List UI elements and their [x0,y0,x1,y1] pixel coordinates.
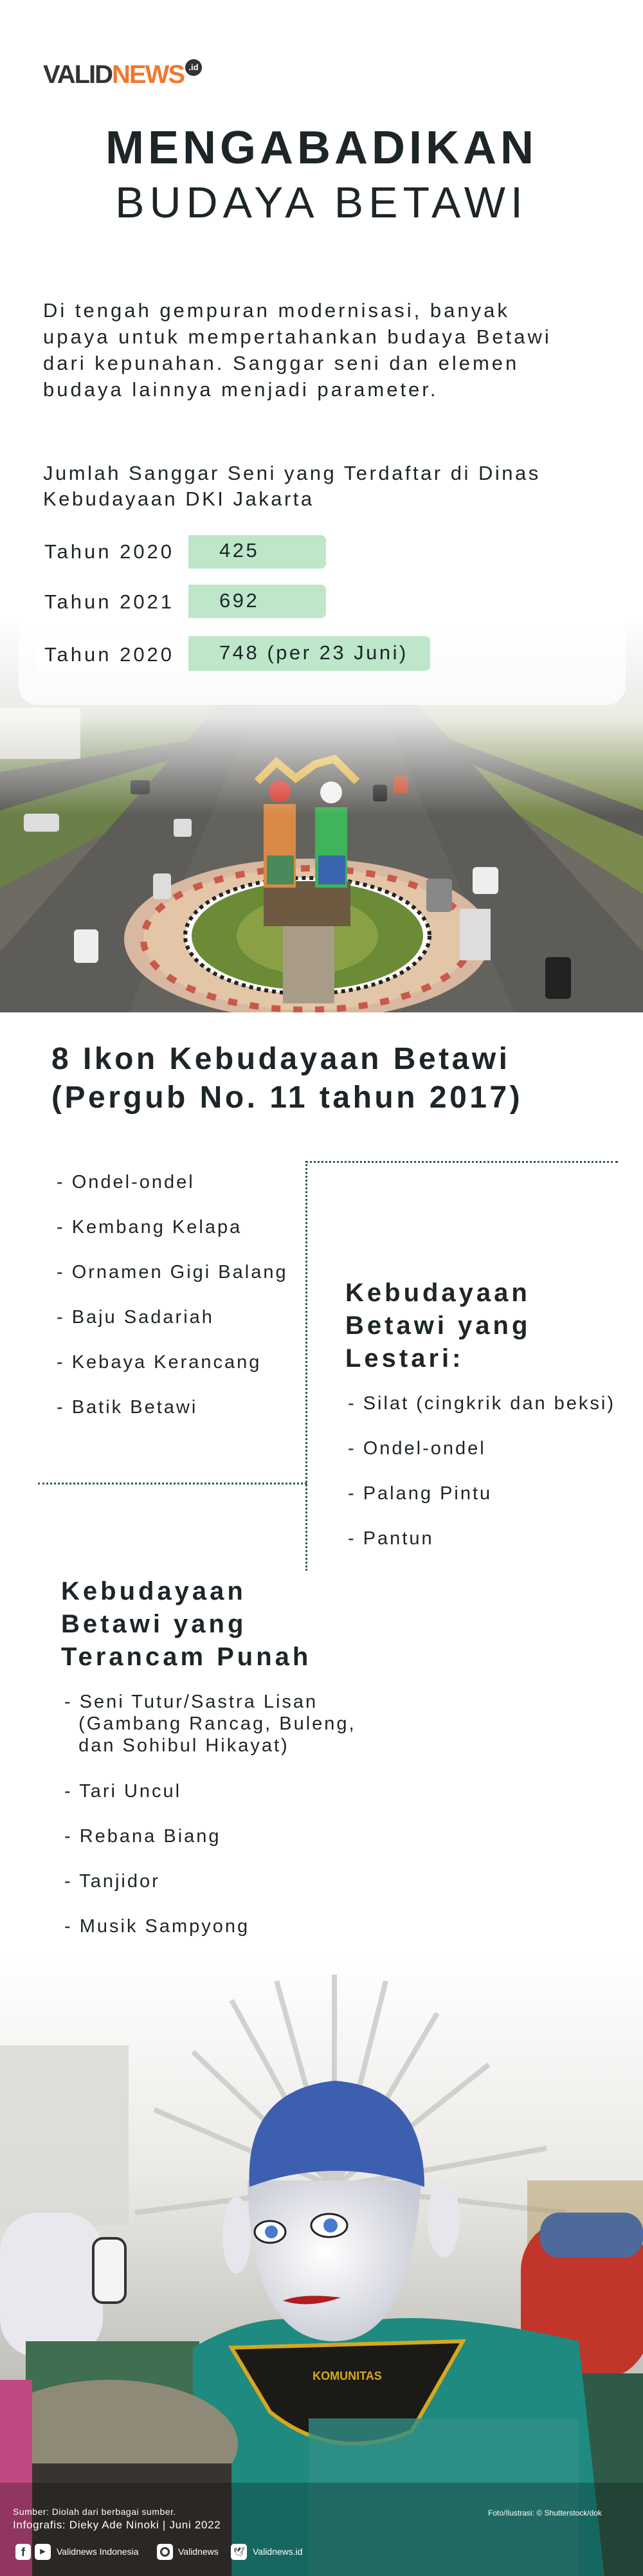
list: lestari: - Pantun [348,1528,434,1549]
heading: Lestari: Betawi yang [345,1311,530,1340]
heading: 8 Ikon: (Pergub No. 11 tahun 2017) [51,1081,523,1115]
logo: Validnews: .id [188,62,199,72]
title: MENGABADIKAN [105,122,538,174]
logo: Validnews: VALIDNEWS [43,60,184,89]
icon: youtube [35,2544,51,2560]
row 2021: 692 [219,589,259,612]
list: lestari: - Palang Pintu [348,1483,492,1504]
footer credits: Sumber: Diolah dari berbagai sumber. [13,2507,176,2517]
list: terancam punah: - Tari Uncul [64,1781,181,1802]
heading: Terancam Punah: Betawi yang [61,1610,246,1638]
social icons [15,2544,303,2560]
heading: Lestari [345,1279,530,1373]
list: 8 ikon: - Kebaya Kerancang [57,1352,261,1373]
intro paragraph [43,299,552,401]
footer credits [13,2507,221,2531]
chart heading [43,462,541,510]
list: 8 ikon: - Ornamen Gigi Balang [57,1262,288,1283]
chart heading: Kebudayaan DKI Jakarta [43,488,314,510]
intro paragraph: dari kepunahan. Sanggar seni dan elemen [43,352,519,374]
list: terancam punah: (Gambang Rancag, Buleng, [78,1713,356,1734]
list: terancam punah [64,1692,356,1937]
dotted dividers [305,1161,618,1163]
heading: 8 Ikon: 8 Ikon Kebudayaan Betawi [51,1042,511,1076]
social icons: Validnews.id [253,2546,303,2557]
title: BUDAYA BETAWI [115,178,528,227]
top panel background [19,0,626,705]
icon: instagram [157,2544,173,2560]
title [105,122,538,227]
icon: facebook: f [21,2546,25,2559]
row 2020 [44,535,326,569]
intro paragraph: Di tengah gempuran modernisasi, banyak [43,299,510,322]
list: terancam punah: - Musik Sampyong [64,1916,249,1937]
heading: Terancam Punah: Kebudayaan [61,1577,246,1605]
icon: twitter [231,2544,247,2560]
photo: ondel-ondel bottom [0,1975,643,2576]
list: terancam punah: dan Sohibul Hikayat) [78,1735,289,1756]
photo credit: Foto/Ilustrasi: © Shutterstock/dok [488,2508,602,2517]
list: 8 ikon: - Kembang Kelapa [57,1217,242,1238]
list: terancam punah: - Tanjidor [64,1871,160,1892]
list: 8 ikon: - Ondel-ondel [57,1172,195,1192]
chart heading: Jumlah Sanggar Seni yang Terdaftar di Dinas [43,462,541,484]
social icons: Validnews [178,2546,219,2557]
photo: ondel-ondel bottom: KOMUNITAS [312,2370,382,2382]
heading: Terancam Punah: Terancam Punah [61,1643,311,1671]
intro paragraph: upaya untuk mempertahankan budaya Betawi [43,325,552,348]
list: terancam punah: - Seni Tutur/Sastra Lisan [64,1692,318,1712]
list: 8 ikon: - Baju Sadariah [57,1307,214,1328]
list: 8 ikon [57,1172,288,1418]
row 2022: Tahun 2020 [44,643,174,666]
list: lestari [348,1393,615,1549]
list: terancam punah: - Rebana Biang [64,1826,221,1847]
heading: 8 Ikon [51,1042,523,1115]
list: lestari: - Silat (cingkrik dan beksi) [348,1393,615,1414]
icon: twitter: 🕊 [233,2546,244,2557]
heading: Lestari: Kebudayaan [345,1279,530,1307]
photo: roundabout with ondel-ondel statues [0,652,643,1012]
heading: Lestari: Lestari: [345,1344,464,1373]
list: 8 ikon: - Batik Betawi [57,1397,197,1418]
row 2020: 425 [219,539,259,562]
intro paragraph: budaya lainnya menjadi parameter. [43,378,439,401]
icon: youtube: ▶ [40,2548,46,2555]
row 2022: 748 (per 23 Juni) [219,641,408,664]
row 2021: Tahun 2021 [44,590,174,613]
data rows [44,535,430,671]
footer credits: Infografis: Dieky Ade Ninoki | Juni 2022 [13,2519,221,2531]
list: lestari: - Ondel-ondel [348,1438,486,1459]
heading: Terancam Punah [61,1577,311,1671]
row 2020: Tahun 2020 [44,540,174,563]
icon: facebook [15,2544,31,2560]
row 2022 [44,636,430,671]
row 2021 [44,585,326,618]
social icons: Validnews Indonesia [57,2546,138,2557]
